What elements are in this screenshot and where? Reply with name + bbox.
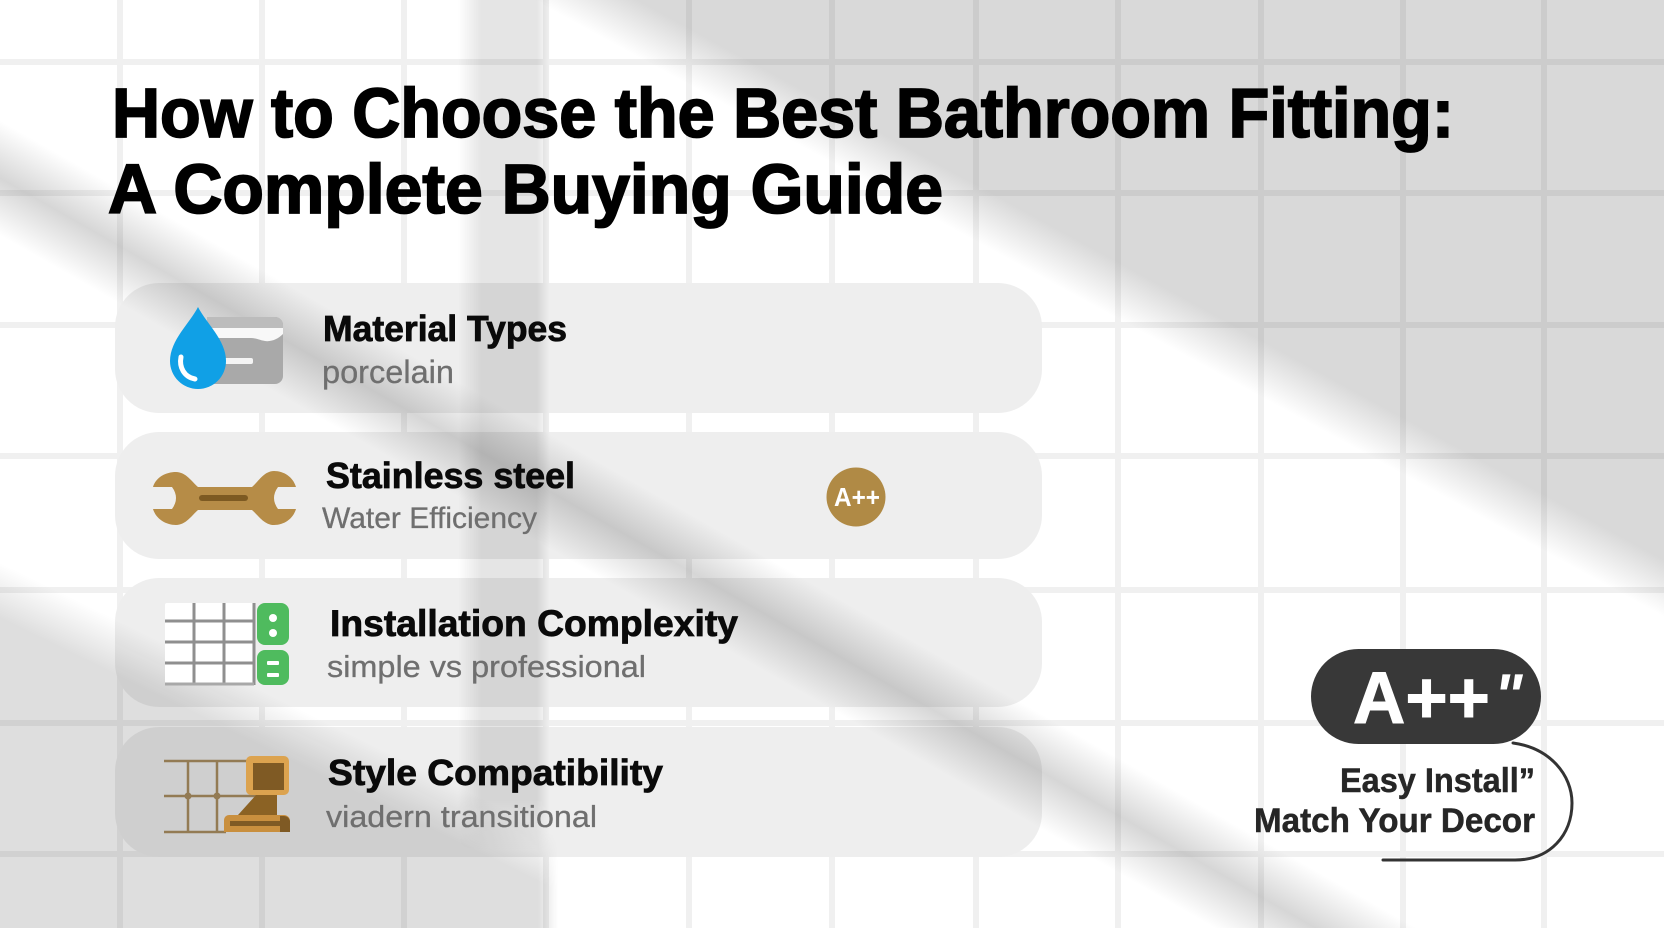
text: simple vs professional: simple vs professional <box>327 649 646 684</box>
badge: A++ pill <box>1311 649 1541 744</box>
text: match your decor: Match Your Decor <box>1254 802 1535 840</box>
callout: A++ easy install <box>1254 649 1572 860</box>
icon: water drop and basin <box>170 307 283 389</box>
arrow: curved connector <box>1383 743 1572 860</box>
panel: stainless steel <box>115 432 1042 559</box>
title: How to Choose the Best Bathroom Fitting: <box>112 74 1454 152</box>
badge: A++ rating: A++ <box>834 482 880 512</box>
heading: style compatibility: Style Compatibility <box>328 752 663 793</box>
title <box>108 74 1454 228</box>
title: A Complete Buying Guide <box>108 150 943 228</box>
panel: installation complexity <box>115 578 1042 707</box>
text: water efficiency: Water Efficiency <box>322 502 537 535</box>
icon: wrench <box>153 471 296 525</box>
badge: A++ pill: A++ <box>1353 658 1490 739</box>
heading: material types: Material Types <box>323 308 567 349</box>
text: viadern transitional: viadern transitional <box>326 799 597 834</box>
panel: material types <box>115 283 1042 413</box>
icon: tile frame with fixture <box>164 756 290 832</box>
text: easy install: Easy Install” <box>1340 762 1535 800</box>
heading: stainless steel: Stainless steel <box>326 455 575 496</box>
heading: installation complexity: Installation Complexity <box>330 603 738 644</box>
badge: A++ rating <box>826 468 886 526</box>
badge: A++ pill: " <box>1494 662 1524 729</box>
panel: style compatibility <box>115 727 1042 851</box>
icon: tile grid with green panels <box>165 603 289 685</box>
text: porcelain: porcelain <box>322 354 454 390</box>
